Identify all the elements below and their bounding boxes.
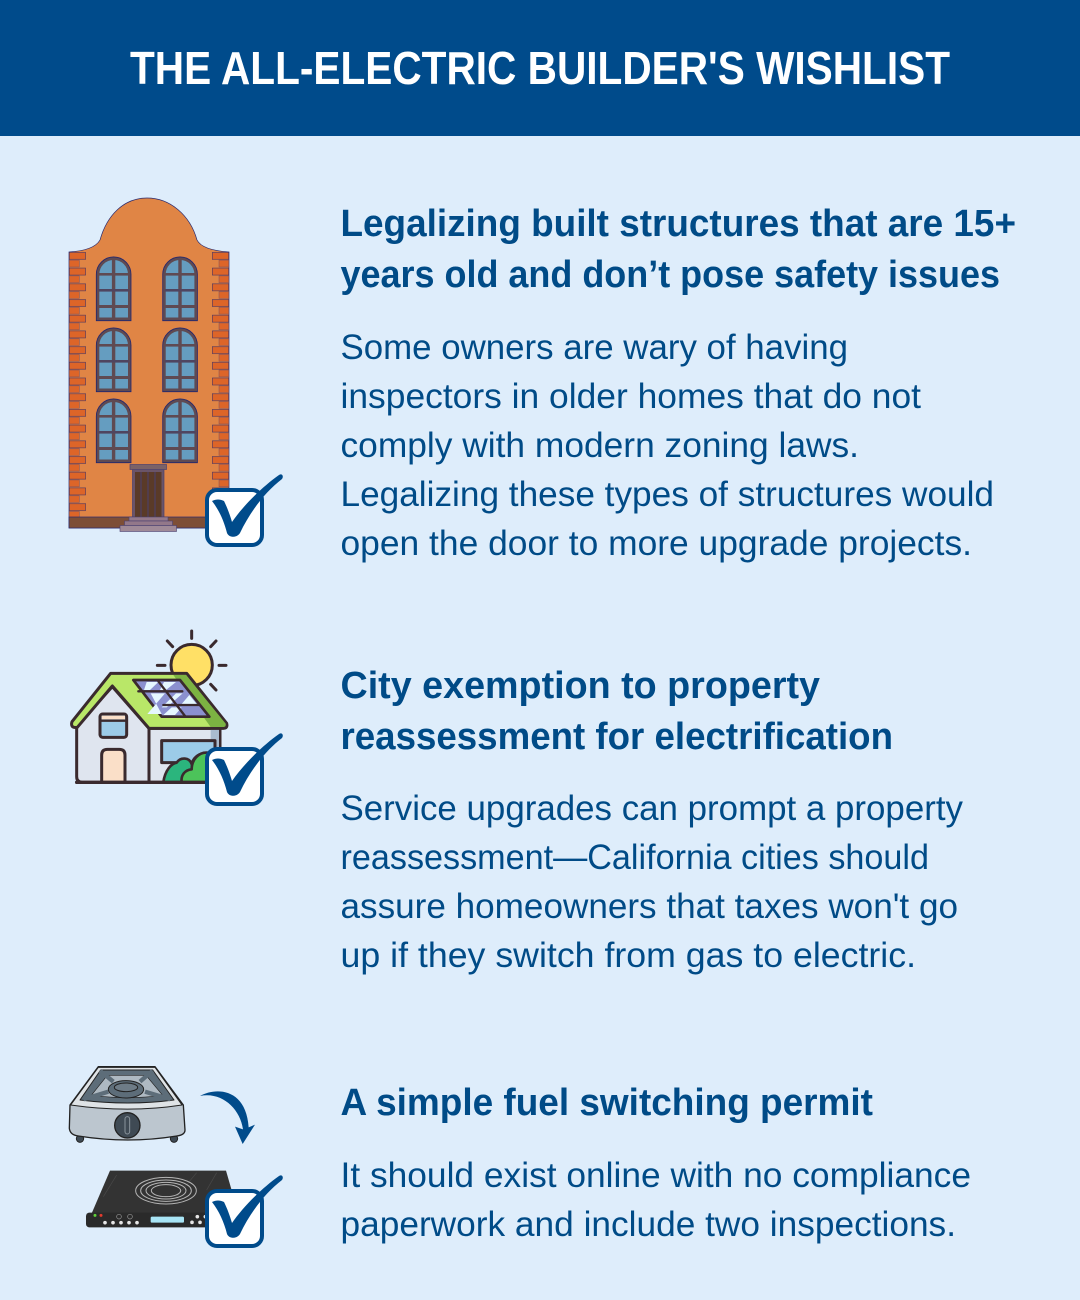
heading: legalizing built structures: years old and don’t pose safety issues — [340, 254, 1000, 296]
heading: city exemption: reassessment for electrification — [340, 716, 893, 758]
text block: legalizing body: comply with modern zoning laws. — [340, 426, 859, 465]
icon: checkbox — [207, 1175, 283, 1246]
heading: fuel switching permit: A simple fuel switching permit — [340, 1082, 873, 1124]
title: THE ALL-ELECTRIC BUILDER'S WISHLIST — [130, 42, 950, 94]
text block: legalizing body: open the door to more upgrade projects. — [340, 524, 972, 563]
text block: legalizing body: Some owners are wary of having — [340, 328, 848, 367]
icon: brick building with checkbox — [69, 198, 283, 545]
text block: legalizing body: Legalizing these types of structures would — [340, 475, 994, 514]
icon: gas stove — [69, 1067, 185, 1142]
text block: fuel switching body — [340, 1156, 971, 1244]
icon: induction cooktop — [86, 1171, 239, 1227]
text block: legalizing body: inspectors in older homes that do not — [340, 377, 921, 416]
icon: house with solar panels and checkbox — [72, 631, 283, 804]
header banner — [0, 0, 1080, 136]
arrow: curved down — [200, 1091, 255, 1144]
heading: legalizing built structures — [340, 203, 1016, 296]
icon: gas stove to induction cooktop with checkbox — [69, 1067, 283, 1246]
text block: fuel switching body: It should exist online with no compliance — [340, 1156, 971, 1195]
text block: city exemption body: up if they switch from gas to electric. — [340, 936, 916, 975]
text block: city exemption body: assure homeowners that taxes won't go — [340, 887, 958, 926]
text block: legalizing body — [340, 328, 994, 563]
heading: legalizing built structures: Legalizing built structures that are 15+ — [340, 203, 1016, 245]
icon: checkbox — [207, 474, 283, 545]
heading: city exemption — [340, 665, 893, 758]
text block: city exemption body — [340, 789, 963, 975]
text block: city exemption body: Service upgrades can prompt a property — [340, 789, 963, 828]
text block: city exemption body: reassessment—California cities should — [340, 838, 929, 877]
heading: city exemption: City exemption to property — [340, 665, 820, 707]
icon: checkbox — [207, 733, 283, 804]
text block: fuel switching body: paperwork and include two inspections. — [340, 1205, 956, 1244]
